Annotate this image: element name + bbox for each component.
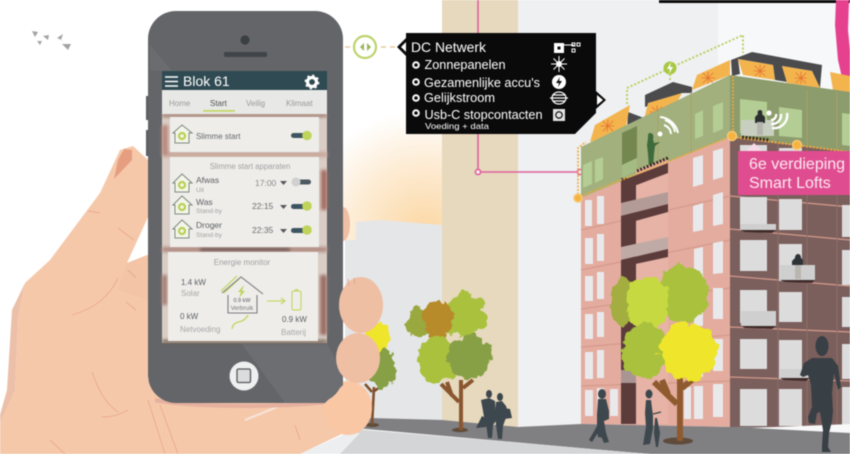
wifi icon left xyxy=(658,117,678,136)
woman silhouette on roof xyxy=(647,133,660,168)
device row: was xyxy=(173,196,312,215)
list: features: Zonnepanelen xyxy=(424,57,506,72)
orange dotted roof wiring xyxy=(578,76,850,198)
card: slimme start: Slimme start xyxy=(196,132,241,141)
callout: DC Netwerk: DC Netwerk xyxy=(411,39,487,55)
icon: direct current xyxy=(550,92,568,104)
card: energie monitor: Netvoeding xyxy=(180,325,220,334)
energy house diagram xyxy=(221,276,301,329)
apartment building xyxy=(581,52,850,428)
runner silhouette xyxy=(800,336,841,452)
device row: was: Stand-by xyxy=(196,208,223,215)
orange junction nodes xyxy=(574,132,802,202)
list: features xyxy=(424,57,542,131)
gear icon xyxy=(306,76,318,88)
device row: droger xyxy=(173,220,312,239)
list: features: Usb-C stopcontacten xyxy=(424,107,542,122)
tab bar: Start xyxy=(210,99,228,108)
top right black bar xyxy=(659,0,850,3)
palm and thumb xyxy=(0,146,352,454)
pink facade xyxy=(581,137,730,427)
facade lines xyxy=(581,196,850,386)
balcony column xyxy=(621,158,668,424)
device row: was: Was xyxy=(196,197,213,207)
card: energie monitor: 0.9 kW xyxy=(282,315,307,324)
screen background photo xyxy=(162,90,327,343)
middle tree xyxy=(408,293,492,432)
wifi icon right xyxy=(766,110,787,128)
icon: battery bolt xyxy=(552,75,566,89)
icon: sun xyxy=(551,56,567,72)
sixth floor: green facade xyxy=(581,75,850,198)
balconies xyxy=(740,224,815,381)
icon: usb socket xyxy=(553,109,565,121)
shadow under phone xyxy=(155,400,340,406)
device row: droger: Stand-by xyxy=(196,232,223,239)
list bullets xyxy=(413,62,419,116)
brown facade windows xyxy=(740,145,850,426)
couple walking xyxy=(476,390,512,439)
smartphone xyxy=(146,11,343,403)
pedestrian left xyxy=(589,389,609,443)
energy house diagram: Verbruik xyxy=(231,305,254,312)
card: slimme start apparaten xyxy=(170,157,319,247)
callout: DC Netwerk xyxy=(397,33,606,134)
device row: afwas: 17:00 xyxy=(255,178,277,188)
device row: afwas xyxy=(173,174,311,194)
pink facade windows xyxy=(585,148,723,419)
card: energie monitor: 1.4 kW xyxy=(181,278,206,287)
fingers gripping phone xyxy=(336,277,383,383)
connector: green DC node with dashed line xyxy=(345,36,396,58)
card: slimme start apparaten: Slimme start apparaten xyxy=(210,162,290,171)
big tree xyxy=(610,265,717,444)
small tree behind fingers xyxy=(365,322,396,427)
roof: dark plant rooms xyxy=(627,52,822,134)
skin creases xyxy=(50,211,300,454)
pink connector line xyxy=(475,0,583,175)
energy house diagram: 0.9 kW xyxy=(233,298,251,304)
pedestrian with bicycle xyxy=(643,390,661,447)
roof: solar panels xyxy=(590,59,850,142)
callout: 6e verdieping Smart Lofts: 6e verdieping xyxy=(749,156,845,173)
card: energie monitor: Energie monitor xyxy=(214,258,271,267)
device row: droger: 22:35 xyxy=(252,225,274,235)
brown facade xyxy=(730,137,850,428)
earpiece xyxy=(224,35,267,57)
phone body xyxy=(146,11,343,403)
list: features: Voeding + data xyxy=(425,121,489,131)
green dotted solar wiring with bolt node xyxy=(627,35,743,104)
tab bar: Home xyxy=(169,99,191,108)
app header bar xyxy=(162,71,327,90)
card: energie monitor: Batterij xyxy=(281,328,306,337)
device row: afwas: Uit xyxy=(196,187,204,194)
person on balcony xyxy=(792,254,803,265)
device row: was: 22:15 xyxy=(252,201,274,211)
icon: network xyxy=(554,43,580,53)
card: slimme start xyxy=(170,117,319,152)
home button xyxy=(230,362,258,390)
list: features: Gelijkstroom xyxy=(424,90,495,105)
callout: 6e verdieping Smart Lofts xyxy=(738,143,850,195)
card: energie monitor xyxy=(168,252,318,341)
app header bar: Blok 61 xyxy=(183,73,230,89)
device row: droger: Droger xyxy=(196,220,222,230)
card: energie monitor: 0 kW xyxy=(180,312,199,321)
tab bar: Klimaat xyxy=(286,99,313,108)
hand holding phone xyxy=(0,146,352,454)
callout: 6e verdieping Smart Lofts: Smart Lofts xyxy=(749,175,831,192)
ground: street and pavement xyxy=(300,418,850,454)
man on loft balcony xyxy=(755,110,765,123)
fingers behind phone edge xyxy=(324,207,372,435)
birds xyxy=(32,31,71,50)
tab bar: Veilig xyxy=(246,99,265,108)
card: energie monitor: Solar xyxy=(181,289,200,298)
pink ring segment xyxy=(835,0,850,108)
device row: afwas: Afwas xyxy=(196,175,219,185)
highlight streak on hand xyxy=(245,403,287,420)
list: features: Gezamenlijke accu's xyxy=(424,75,540,90)
thumbnail xyxy=(114,149,132,179)
tab bar xyxy=(162,90,327,114)
